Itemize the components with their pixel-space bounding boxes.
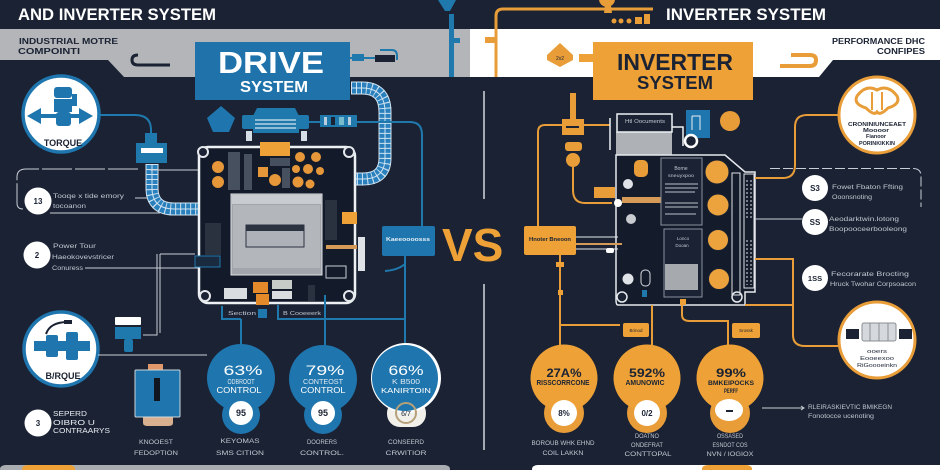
icon: orange pill xyxy=(780,55,816,66)
stat: drive 79%: CONTROL xyxy=(300,386,346,395)
header band: left grey xyxy=(0,29,470,77)
stat labels left xyxy=(134,438,427,457)
panel title: drive: DRIVE xyxy=(218,45,324,80)
icon: bottom right circle: RiGoooeinkn xyxy=(857,363,897,369)
stat labels right xyxy=(532,433,754,458)
stat labels right: DOATNO xyxy=(635,433,659,440)
inverter module top xyxy=(538,93,615,226)
stat: inverter 27A%: RISSCORRCONE xyxy=(536,380,590,387)
callout S3 xyxy=(770,168,921,207)
stat: drive 63%: ODBROOT xyxy=(228,379,255,386)
stat labels right: CONTTOPAL xyxy=(624,451,672,458)
title left: AND INVERTER SYSTEM xyxy=(18,5,216,24)
stat: inverter 592%: 592% xyxy=(629,366,665,380)
callout 3: OIBRO U xyxy=(53,420,95,427)
subheading left xyxy=(18,37,119,56)
icon: torque circle bottom xyxy=(24,312,98,386)
controller box: drive xyxy=(382,226,435,256)
stat: drive 79%: CONTEOST xyxy=(303,379,344,386)
line to top circle xyxy=(755,115,838,178)
stat labels left: FEDOPTION xyxy=(134,450,178,457)
stat labels right: OSSASED xyxy=(717,433,743,440)
note with arrow: RLEIRASKIEVTIC BMIKEGN xyxy=(808,404,892,411)
circuit board: inverter xyxy=(614,155,755,305)
callout SS: Boopooceerbooleong xyxy=(829,226,907,233)
panel title: drive xyxy=(195,42,350,100)
title left xyxy=(18,0,392,24)
stat labels left: DOORERS xyxy=(307,439,338,446)
stat: drive 79%: 79% xyxy=(306,362,344,378)
subheading right: CONFIPES xyxy=(877,47,926,56)
board screws xyxy=(198,147,354,301)
stat: inverter 99%: 99% xyxy=(716,366,746,380)
stat: drive 66%: KANIRTOIN xyxy=(381,386,431,395)
icon: blue pentagon xyxy=(207,106,235,132)
callout S3: Ooonsnoting xyxy=(832,194,872,201)
board footnotes: Section xyxy=(228,311,256,317)
orange connection lines bottom xyxy=(560,255,728,347)
orange small tags: Srossk xyxy=(739,328,754,333)
callout 3: CONTRAARYS xyxy=(53,428,110,435)
icon: top right circle: Moooor xyxy=(863,128,890,134)
controller box: inverter xyxy=(524,226,622,255)
cable right ribbon xyxy=(338,88,385,179)
callout 1: tocoanon xyxy=(53,203,86,210)
icon: top right circle: CRONINIUNCEAET xyxy=(848,122,907,128)
coupler module xyxy=(242,108,309,141)
icon: hook left xyxy=(132,55,170,65)
center text panels: Borne xyxy=(674,166,688,172)
stat: inverter 27A%: 27A% xyxy=(546,366,582,380)
subheading left: INDUSTRIAL MOTRE xyxy=(19,37,119,46)
controller box: drive: Kaeeoooosss xyxy=(386,237,430,243)
controller box: inverter: Hnoter Bneoon xyxy=(529,237,572,243)
stat: drive 63%: 63% xyxy=(224,362,262,378)
IC columns xyxy=(228,152,290,190)
icon: torque circle top: TORQUE xyxy=(44,138,82,148)
bottom bar right xyxy=(532,465,940,470)
icon: orange hexagon tag: 2x2 xyxy=(556,56,564,62)
icon: orange hexagon tag xyxy=(547,43,593,67)
bottom bar left xyxy=(0,465,450,470)
callout 1SS: Hruck Twohar Corpsoacon xyxy=(830,281,916,288)
circuit board: drive xyxy=(195,142,365,305)
right strip xyxy=(732,173,754,295)
stat labels left: KEYOMAS xyxy=(220,438,260,445)
panel title: inverter: SYSTEM xyxy=(637,73,713,93)
callout 2: Conuress xyxy=(52,265,84,272)
icon: top right circle: PORINKIKKIN xyxy=(859,141,895,147)
subheading right xyxy=(832,37,926,56)
board footnotes: B Cooeeerk xyxy=(283,311,321,317)
stat: inverter 99%: BMKEIPOCKS xyxy=(708,380,755,387)
stat labels right: ONDEFRAT xyxy=(631,442,663,449)
callout 2: Haeokovevstricer xyxy=(52,254,115,261)
callout 1SS xyxy=(802,265,916,291)
center text panels: Dooan xyxy=(675,243,689,248)
VS: VS xyxy=(442,219,503,271)
callout 1: 13 xyxy=(34,197,43,206)
subheading right: PERFORMANCE DHC xyxy=(832,37,925,46)
callout 2 xyxy=(24,242,198,335)
note with arrow: Fonotocce ucenoting xyxy=(808,413,874,420)
stat labels right: ESNDOT COS xyxy=(712,442,748,449)
blue riser top xyxy=(438,0,460,77)
stat labels left: CONTROL. xyxy=(300,450,344,457)
callout SS xyxy=(755,209,907,235)
icon: bottom right circle xyxy=(839,302,915,378)
callout 2: 2 xyxy=(35,251,40,260)
icon: torque circle top xyxy=(23,76,99,152)
note with arrow xyxy=(762,404,892,420)
panel title: inverter xyxy=(593,42,753,100)
callout 1 xyxy=(17,169,198,214)
orange small tags xyxy=(556,262,760,338)
icon: torque circle bottom: B/RQUE xyxy=(45,371,81,381)
callout 1: Tooqe x tide emory xyxy=(53,193,125,200)
orange riser top xyxy=(485,0,653,77)
icon: bottom right circle: ooers xyxy=(867,349,887,355)
stat labels left: CONSEERD xyxy=(388,439,424,446)
side parts right xyxy=(325,200,365,278)
stat: inverter 592%: AMUNOWIC xyxy=(626,380,664,387)
stat: drive 63%: CONTROL xyxy=(216,386,262,395)
device header: Htl Oocuments xyxy=(625,119,666,125)
stat labels right: COIL LAKKN xyxy=(542,450,584,457)
left parts xyxy=(614,160,742,302)
stat: drive 79% xyxy=(289,345,357,434)
stat: inverter 592%: 0/2 xyxy=(641,409,653,418)
stat: drive 66%: K B500 xyxy=(392,379,420,386)
center divider xyxy=(483,91,485,450)
callout 1SS: 1SS xyxy=(808,274,822,283)
orange small tags: Brinod xyxy=(629,328,643,333)
panel title: drive: SYSTEM xyxy=(240,79,308,96)
stat: inverter 27A%: 8% xyxy=(558,409,570,418)
stat: drive 79%: 95 xyxy=(318,408,328,418)
icon: top right circle xyxy=(839,77,915,153)
stat labels right: BOROUB WHK EHND xyxy=(532,440,595,447)
center text panels: Lonco xyxy=(677,236,690,241)
center text panels: sneuyxpoo xyxy=(668,173,695,178)
stat labels left: SMS CITION xyxy=(216,450,264,457)
side parts left xyxy=(195,223,315,305)
connector block xyxy=(136,133,167,163)
callout S3: S3 xyxy=(810,184,820,193)
stat: inverter 27A% xyxy=(530,344,598,433)
cable left ribbon xyxy=(152,164,214,209)
blue connection lines bottom xyxy=(222,256,405,345)
blue chip module xyxy=(135,364,180,426)
stat: inverter 592% xyxy=(614,344,680,433)
display module xyxy=(231,194,322,275)
header band: right white xyxy=(470,29,940,77)
stat: drive 66%: 66% xyxy=(388,362,424,378)
callout SS: Aeodarktwin.lotong xyxy=(829,216,899,223)
callout 1SS: Fecorarate Brocting xyxy=(831,271,910,278)
callout 3 xyxy=(24,410,110,436)
panel title: inverter: INVERTER xyxy=(617,49,733,75)
cable: torque to connector xyxy=(100,115,151,134)
stat: drive 66% xyxy=(371,343,441,427)
callout 2: Power Tour xyxy=(53,243,97,250)
orange chip top xyxy=(260,142,290,156)
callout 3: 3 xyxy=(36,419,41,428)
callout S3: Fowet Fbaton Ffting xyxy=(832,184,903,191)
stat labels right: NVN / IOGIOX xyxy=(706,451,754,458)
device header xyxy=(610,110,740,155)
terminal strip xyxy=(309,115,422,226)
stat labels left: KNOOEST xyxy=(139,439,173,446)
stat: inverter 99% xyxy=(696,344,764,433)
title right: INVERTER SYSTEM xyxy=(666,5,826,24)
small connector xyxy=(115,317,141,352)
connector right of drive title xyxy=(350,50,397,62)
orange capacitors xyxy=(705,160,730,290)
callout 3: SEPERD xyxy=(53,411,87,418)
stat labels left: CRWITIOR xyxy=(386,450,427,457)
icon: top right circle: Fianoor xyxy=(866,134,887,140)
stat: drive 66%: 6/7 xyxy=(401,411,411,418)
line to bottom circle xyxy=(745,259,838,346)
subheading left: COMPOINTI xyxy=(18,47,80,56)
stat: inverter 99%: PERFF xyxy=(724,389,738,395)
stat: drive 63%: 95 xyxy=(236,408,246,418)
orange capacitors xyxy=(212,152,324,188)
board footnotes xyxy=(228,309,321,318)
callout SS: SS xyxy=(810,218,821,227)
icon: bottom right circle: Eooeexoo xyxy=(860,356,894,362)
center text panels xyxy=(661,158,702,297)
line from torque circle xyxy=(98,354,207,356)
stat: drive 63% xyxy=(207,344,275,434)
